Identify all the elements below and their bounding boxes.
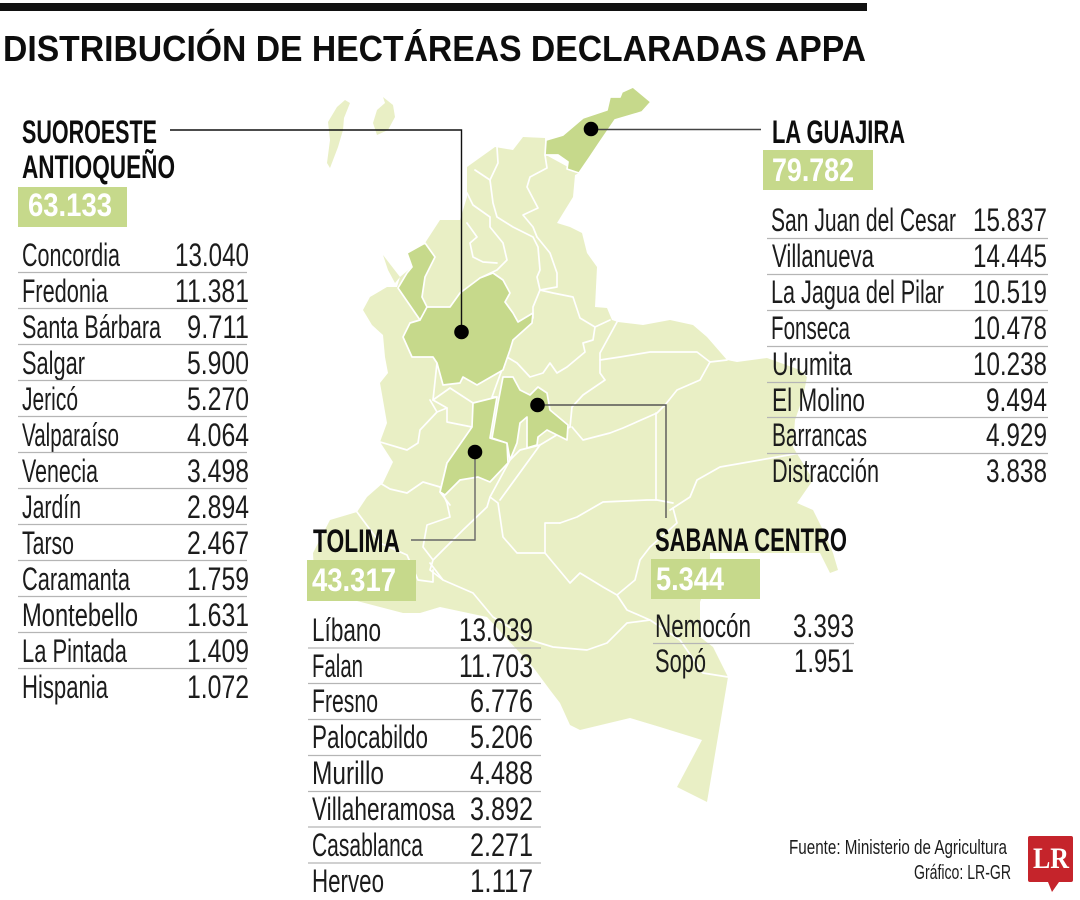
map: mainland base	[313, 137, 838, 802]
municipality table: 5.206	[470, 719, 533, 755]
municipality table	[308, 612, 541, 899]
municipality table: Murillo	[312, 755, 384, 791]
municipality table: 9.711	[187, 309, 249, 345]
map: highlighted La Guajira	[545, 87, 651, 173]
municipality table: Venecia	[22, 453, 98, 489]
municipality table: 6.776	[470, 683, 533, 719]
heading: SABANA CENTRO	[655, 522, 847, 558]
municipality table: 5.900	[187, 345, 249, 381]
heading	[22, 114, 175, 185]
municipality table: 1.409	[187, 633, 249, 669]
municipality table: San Juan del Cesar	[771, 202, 956, 238]
total badge: 63.133	[28, 187, 112, 223]
municipality table: 2.467	[187, 525, 249, 561]
municipality table: Palocabildo	[312, 719, 428, 755]
municipality table: 5.270	[187, 381, 249, 417]
municipality table: La Jagua del Pilar	[771, 274, 944, 310]
municipality table: 1.117	[470, 863, 533, 899]
municipality table: Fresno	[312, 683, 378, 719]
municipality table: Jericó	[22, 381, 78, 417]
municipality table: 1.759	[187, 561, 249, 597]
icon: LR logo: LR	[1033, 842, 1069, 875]
municipality table: 11.381	[175, 273, 249, 309]
municipality table: 3.498	[187, 453, 249, 489]
municipality table: Falan	[312, 648, 363, 684]
heading: SUOROESTE	[22, 114, 157, 150]
municipality table: Concordia	[22, 237, 120, 273]
municipality table: 4.488	[470, 755, 533, 791]
total badge: 5.344	[656, 561, 724, 597]
map: Providencia island	[373, 97, 395, 135]
municipality table: La Pintada	[22, 633, 127, 669]
municipality table: 14.445	[973, 238, 1047, 274]
connector: Suroeste Antioqueño	[170, 130, 469, 339]
municipality table: 13.040	[175, 237, 249, 273]
title: DISTRIBUCIÓN DE HECTÁREAS DECLARADAS APPA	[3, 27, 866, 69]
municipality table: 15.837	[973, 202, 1047, 238]
municipality table: 1.951	[794, 643, 854, 679]
municipality table: Tarso	[22, 525, 74, 561]
municipality table: 2.271	[470, 827, 533, 863]
municipality table: 10.478	[973, 310, 1047, 346]
panel: Sabana Centro	[651, 522, 854, 679]
municipality table: Casablanca	[312, 827, 423, 863]
municipality table: 1.072	[187, 669, 249, 705]
municipality table: Villanueva	[772, 238, 874, 274]
municipality table: 10.238	[973, 346, 1047, 382]
map: department borders	[357, 147, 800, 677]
municipality table: Barrancas	[772, 417, 867, 453]
municipality table: Hispania	[22, 669, 108, 705]
municipality table: 4.064	[187, 417, 249, 453]
map: highlighted northern Chocó	[398, 243, 435, 320]
map: highlighted Tolima	[440, 397, 508, 495]
heading: LA GUAJIRA	[772, 114, 905, 150]
total badge	[651, 559, 760, 599]
connector: Sabana Centro	[530, 398, 666, 518]
municipality table: 9.494	[986, 382, 1047, 418]
municipality table: 10.519	[973, 274, 1047, 310]
municipality table: Salgar	[22, 345, 85, 381]
icon: LR logo	[1028, 836, 1073, 892]
panel: La Guajira	[763, 114, 1048, 489]
total badge: 79.782	[772, 152, 854, 188]
map: highlighted Cundinamarca	[492, 377, 568, 460]
municipality table: Líbano	[312, 612, 381, 648]
connector: Tolima	[411, 445, 482, 540]
municipality table: Santa Bárbara	[22, 309, 161, 345]
municipality table: Villaheramosa	[312, 791, 455, 827]
total badge: 43.317	[312, 562, 396, 598]
map: highlighted Antioquia	[403, 273, 533, 385]
municipality table: Valparaíso	[22, 417, 119, 453]
municipality table: Sopó	[655, 643, 706, 679]
heading: TOLIMA	[313, 523, 400, 559]
municipality table: Jardín	[22, 489, 81, 525]
map: Gulf of Urabá coast strip	[383, 255, 400, 283]
source credits: Fuente: Ministerio de Agricultura	[789, 837, 1008, 859]
municipality table: Nemocón	[655, 608, 751, 644]
municipality table: Fonseca	[771, 310, 850, 346]
municipality table: Herveo	[312, 863, 384, 899]
map of Colombia	[313, 87, 838, 802]
municipality table: 4.929	[986, 417, 1047, 453]
panel: Tolima	[307, 523, 541, 899]
municipality table: 3.393	[793, 608, 854, 644]
municipality table: 3.892	[470, 791, 533, 827]
municipality table: 11.703	[459, 648, 533, 684]
municipality table: 1.631	[187, 597, 249, 633]
heading: ANTIOQUEÑO	[22, 149, 175, 185]
panel: Suroeste Antioqueño	[18, 114, 249, 705]
municipality table	[653, 608, 854, 679]
municipality table	[767, 202, 1048, 489]
municipality table: Caramanta	[22, 561, 130, 597]
municipality table: Montebello	[22, 597, 138, 633]
municipality table: 13.039	[459, 612, 533, 648]
top rule	[0, 3, 867, 11]
municipality table: El Molino	[772, 382, 865, 418]
map: San Andrés island	[327, 100, 350, 168]
source credits: Gráfico: LR-GR	[914, 862, 1011, 884]
municipality table: 2.894	[187, 489, 249, 525]
municipality table	[18, 237, 249, 705]
municipality table: Distracción	[772, 453, 879, 489]
municipality table: Fredonia	[22, 273, 108, 309]
source credits	[789, 837, 1011, 884]
municipality table: Urumita	[772, 346, 852, 382]
municipality table: 3.838	[986, 453, 1047, 489]
connector: La Guajira	[584, 122, 761, 136]
